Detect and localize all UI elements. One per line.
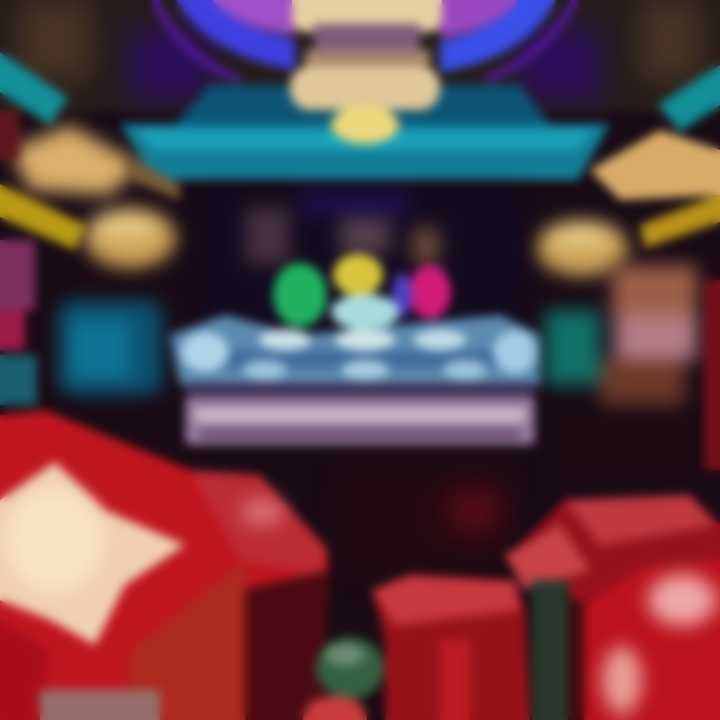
gold and yellow side bands [0,150,720,250]
teal side diagonals [0,52,720,132]
right gold chandelier [536,130,720,276]
left edge slot machine [0,110,37,405]
centre red die [372,575,530,720]
left teal machine [58,300,163,395]
ceiling neon arcs [155,0,575,80]
right edge red wall [560,280,720,470]
teal ceiling band [120,85,610,180]
upper light panel [170,315,540,385]
pale base at bottom left [40,690,160,720]
right machines [545,265,697,405]
central chandelier [290,0,442,144]
right red die stack [505,495,720,720]
coloured blobs on screen [273,254,451,330]
green chip [303,637,384,720]
lower lavender panel [185,383,535,445]
large red die on left [0,410,330,720]
ceiling: dark upper background [0,0,720,112]
dark green post [532,580,584,720]
left gold chandelier [10,125,176,268]
cream star highlight on left die [0,462,284,645]
dark red floor glow [340,470,510,570]
centre dark screen [195,188,525,338]
white spots on right die [602,574,716,714]
